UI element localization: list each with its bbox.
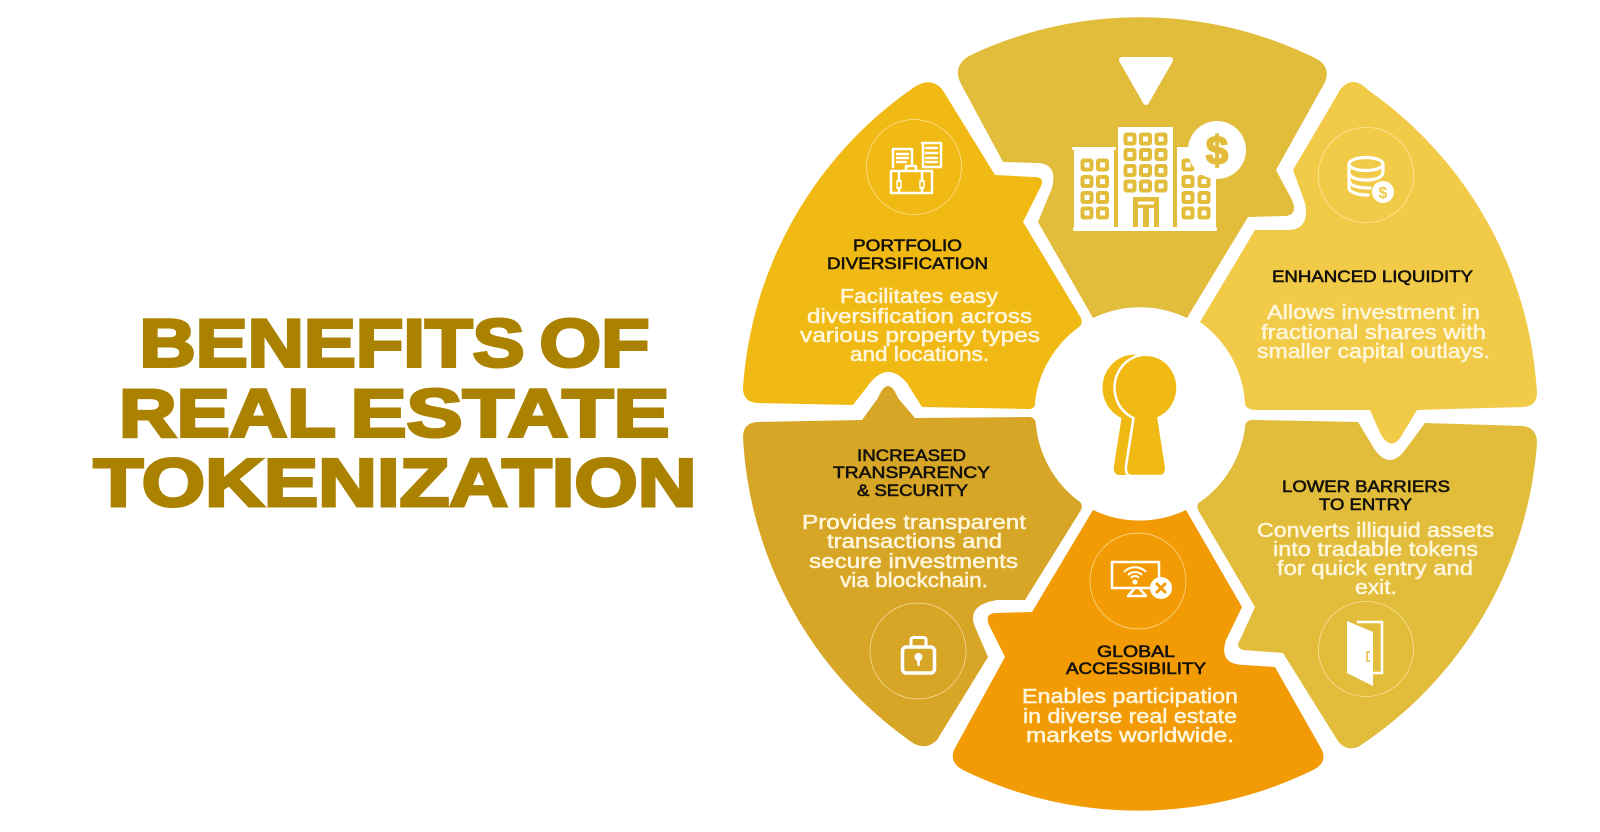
text: barriers description: exit. <box>1355 577 1397 599</box>
icon: monitor with wifi <box>1090 533 1186 629</box>
panel: enhanced liquidity <box>1200 82 1537 444</box>
heading: lower barriers: LOWER BARRIERS <box>1282 477 1450 496</box>
icon: coin stack with dollar <box>1318 127 1414 223</box>
heading: portfolio: PORTFOLIO <box>853 236 962 255</box>
text: portfolio description: and locations. <box>850 344 989 366</box>
title: ESTATE <box>350 376 670 452</box>
text: global description: Enables participation <box>1022 686 1238 708</box>
text: global description: markets worldwide. <box>1026 725 1234 747</box>
text: liquidity description: Allows investment in <box>1267 302 1480 324</box>
icon: open door <box>1318 602 1414 696</box>
title <box>94 306 696 521</box>
icon: buildings with dollar: $ <box>1206 129 1228 173</box>
heading: portfolio: DIVERSIFICATION <box>827 254 988 273</box>
panel: increased transparency and security <box>743 386 1082 746</box>
title: REAL <box>119 376 336 452</box>
heading: transparency <box>833 446 990 500</box>
text: liquidity description <box>1257 302 1490 363</box>
text: portfolio description: diversification across <box>807 306 1032 328</box>
text: portfolio description <box>800 286 1040 366</box>
icon: briefcase and documents <box>866 120 962 214</box>
text: liquidity description: fractional shares with <box>1261 322 1486 344</box>
heading: portfolio <box>827 236 988 273</box>
text: portfolio description: various property types <box>800 325 1040 347</box>
text: barriers description: Converts illiquid assets <box>1257 520 1494 542</box>
text: portfolio description: Facilitates easy <box>840 286 998 308</box>
icon: buildings with dollar <box>1072 121 1246 231</box>
heading: lower barriers: TO ENTRY <box>1319 495 1412 514</box>
panel: portfolio diversification <box>743 82 1082 409</box>
icon: coin stack with dollar: $ <box>1379 185 1388 202</box>
text: transparency description: transactions and <box>827 531 1002 553</box>
text: transparency description: secure investments <box>809 551 1018 573</box>
title: OF <box>540 306 650 382</box>
heading: transparency: TRANSPARENCY <box>833 463 990 482</box>
heading: lower barriers <box>1282 477 1450 514</box>
title: BENEFITS <box>140 306 524 382</box>
icon: down triangle <box>1122 60 1170 102</box>
text: barriers description: into tradable tokens <box>1273 539 1478 561</box>
text: transparency description <box>802 512 1027 592</box>
heading: global accessibility: ACCESSIBILITY <box>1066 659 1206 678</box>
heading: transparency: INCREASED <box>857 446 966 465</box>
heading: transparency: & SECURITY <box>857 481 968 500</box>
panel: global accessibility <box>953 510 1323 811</box>
text: transparency description: via blockchain. <box>840 570 988 592</box>
title: TOKENIZATION <box>94 445 696 521</box>
icon: padlock <box>870 603 966 699</box>
heading: global accessibility: GLOBAL <box>1097 642 1175 661</box>
panel: lower barriers to entry <box>1197 420 1537 748</box>
text: global description: in diverse real estate <box>1023 706 1237 728</box>
text: barriers description <box>1257 520 1494 599</box>
text: transparency description: Provides transparent <box>802 512 1027 534</box>
text: global description <box>1022 686 1238 747</box>
heading: enhanced liquidity: ENHANCED LIQUIDITY <box>1272 267 1473 286</box>
panel: top property segment <box>958 17 1327 318</box>
icon: central keyhole <box>1103 355 1178 476</box>
text: liquidity description: smaller capital outlays. <box>1257 341 1490 363</box>
text: barriers description: for quick entry and <box>1277 558 1473 580</box>
heading: global accessibility <box>1066 642 1206 678</box>
